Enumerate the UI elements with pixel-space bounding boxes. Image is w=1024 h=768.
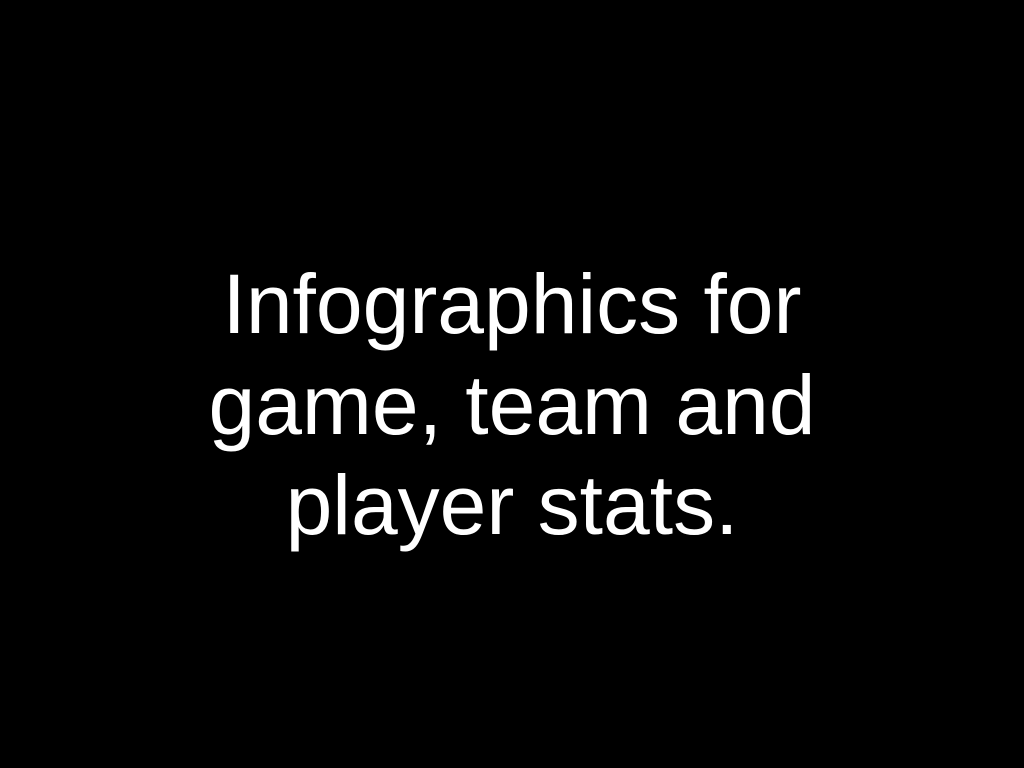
title: game, team and <box>208 358 816 452</box>
title: Infographics for <box>222 257 801 351</box>
title <box>208 257 816 552</box>
title: player stats. <box>286 458 738 552</box>
